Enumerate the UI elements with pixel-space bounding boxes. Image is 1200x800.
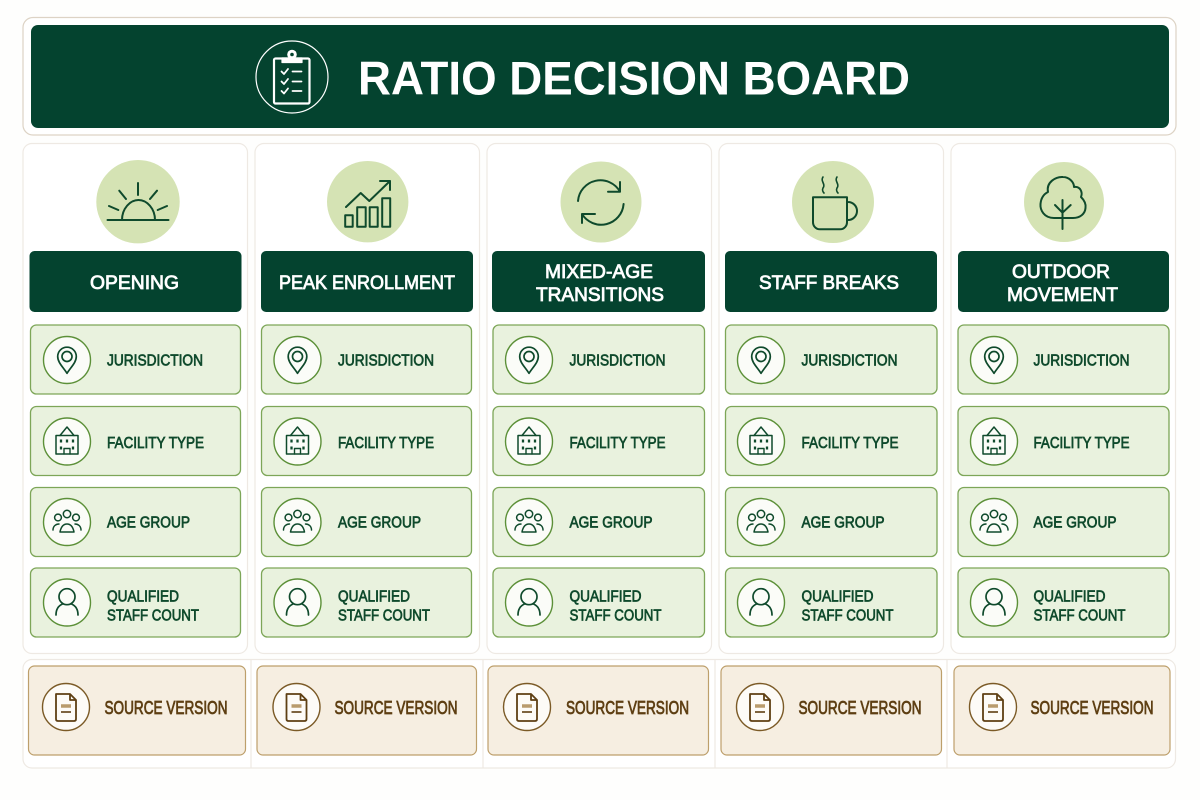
icon: tree [1024, 162, 1104, 242]
heading: mixed-age transitions [492, 251, 705, 312]
icon: sunrise [96, 160, 180, 243]
heading: staff breaks: STAFF BREAKS [759, 273, 899, 294]
panel: mixed-age transitions [487, 144, 712, 654]
item: qualified staff count: QUALIFIED [1034, 589, 1106, 606]
item: facility type [958, 406, 1169, 476]
panel: outdoor movement [951, 144, 1176, 654]
heading: opening: OPENING [90, 273, 179, 294]
item: age group [958, 488, 1169, 556]
item: facility type: FACILITY TYPE [338, 435, 434, 452]
item: facility type [493, 406, 704, 476]
item: qualified staff count [493, 568, 704, 637]
item: jurisdiction: JURISDICTION [570, 352, 666, 370]
item: jurisdiction: JURISDICTION [107, 352, 203, 370]
item: jurisdiction: JURISDICTION [338, 352, 434, 370]
item: facility type: FACILITY TYPE [570, 435, 666, 452]
panel: opening [23, 144, 248, 654]
panel: peak enrollment [255, 144, 480, 654]
panel: staff breaks [719, 144, 944, 654]
item: qualified staff count [262, 568, 472, 637]
item: qualified staff count [958, 568, 1169, 637]
icon: clipboard checklist [256, 41, 328, 113]
title: RATIO DECISION BOARD [358, 52, 910, 104]
heading: outdoor movement [958, 251, 1169, 312]
heading: outdoor movement: MOVEMENT [1007, 285, 1118, 306]
item: jurisdiction [726, 325, 937, 394]
item: jurisdiction [30, 325, 240, 394]
item: qualified staff count: STAFF COUNT [107, 608, 199, 625]
item: qualified staff count: STAFF COUNT [1034, 608, 1126, 625]
item: jurisdiction: JURISDICTION [802, 352, 898, 370]
item: jurisdiction [958, 325, 1169, 394]
item: jurisdiction: JURISDICTION [1034, 352, 1130, 370]
item: age group: AGE GROUP [338, 515, 421, 532]
item: facility type [262, 406, 472, 476]
item: qualified staff count [30, 568, 240, 637]
item: jurisdiction [493, 325, 704, 394]
source card: outdoor movement: SOURCE VERSION [1030, 698, 1154, 718]
source card: opening [28, 666, 246, 755]
item: qualified staff count [726, 568, 937, 637]
source card: staff breaks: SOURCE VERSION [798, 698, 922, 718]
heading: peak enrollment: PEAK ENROLLMENT [279, 273, 455, 294]
source card: peak enrollment: SOURCE VERSION [334, 698, 458, 718]
item: age group: AGE GROUP [1034, 515, 1116, 532]
source card: outdoor movement [954, 666, 1170, 755]
item: facility type: FACILITY TYPE [107, 435, 204, 452]
icon: coffee cup [792, 161, 874, 243]
heading: peak enrollment [261, 251, 473, 312]
item: facility type [30, 406, 240, 476]
item: facility type: FACILITY TYPE [802, 435, 898, 452]
source card: mixed-age transitions: SOURCE VERSION [566, 698, 689, 718]
title banner [23, 18, 1176, 135]
item: age group [30, 488, 240, 556]
item: qualified staff count: QUALIFIED [338, 589, 410, 606]
item: age group: AGE GROUP [570, 515, 652, 532]
source card: staff breaks [721, 666, 942, 755]
item: age group [726, 488, 937, 556]
item: qualified staff count: QUALIFIED [802, 589, 874, 606]
heading: staff breaks [725, 251, 937, 312]
item: age group: AGE GROUP [107, 515, 190, 532]
item: qualified staff count: STAFF COUNT [802, 608, 894, 625]
item: facility type [726, 406, 937, 476]
item: facility type: FACILITY TYPE [1034, 435, 1130, 452]
icon: rising chart [327, 161, 408, 242]
item: age group: AGE GROUP [802, 515, 884, 532]
source card: peak enrollment [257, 666, 476, 755]
panel: source version strip [23, 660, 1176, 768]
heading: outdoor movement: OUTDOOR [1012, 262, 1110, 283]
heading: mixed-age transitions: MIXED-AGE [545, 262, 653, 283]
source card: mixed-age transitions [488, 666, 708, 755]
item: qualified staff count: QUALIFIED [107, 589, 179, 606]
item: age group [262, 488, 472, 556]
item: qualified staff count: QUALIFIED [570, 589, 642, 606]
icon: cycle arrows [560, 162, 642, 242]
heading: opening [30, 251, 242, 312]
item: qualified staff count: STAFF COUNT [570, 608, 662, 625]
source card: opening: SOURCE VERSION [104, 698, 228, 718]
heading: mixed-age transitions: TRANSITIONS [536, 285, 664, 306]
item: jurisdiction [262, 325, 472, 394]
item: qualified staff count: STAFF COUNT [338, 608, 430, 625]
item: age group [493, 488, 704, 556]
